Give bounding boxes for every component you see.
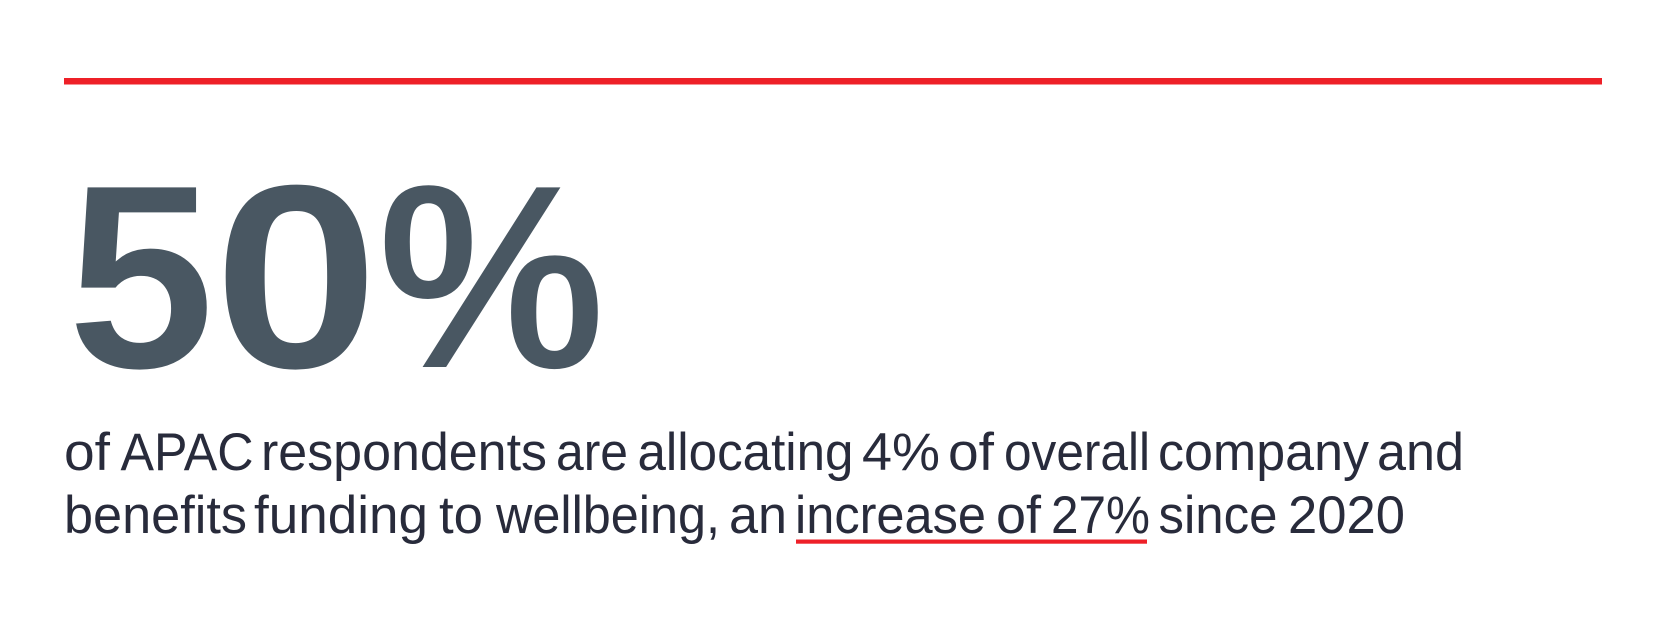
- description line 1: of: [64, 423, 110, 482]
- red underline under "increase of 27%": [796, 540, 1147, 544]
- description line 2: to: [439, 486, 483, 545]
- description line 2: increase: [795, 486, 986, 545]
- description line 1: company: [1158, 423, 1369, 482]
- headline statistic: 50%: [67, 129, 605, 424]
- description line 1: respondents: [261, 423, 547, 482]
- description line 1: and: [1377, 423, 1464, 482]
- description line 1: of: [948, 423, 994, 482]
- description line 1: APAC: [120, 423, 254, 482]
- top red rule: [64, 78, 1602, 84]
- headline statistic: 50%: 0: [213, 129, 380, 424]
- description line 1: allocating: [638, 423, 854, 482]
- description line 1: are: [556, 423, 628, 482]
- description line 2: of: [996, 486, 1041, 545]
- headline statistic: 50%: %: [378, 129, 606, 424]
- description line 1: overall: [1004, 423, 1150, 482]
- description line 2: an: [729, 486, 787, 545]
- description line 2: 27%: [1051, 486, 1150, 545]
- description line 1: 4%: [862, 423, 940, 482]
- description line 2: benefits: [64, 486, 247, 545]
- headline statistic: 50%: 5: [67, 129, 215, 424]
- description line 1: [64, 423, 1464, 482]
- description line 2: [64, 486, 1405, 545]
- description text block: [64, 423, 1464, 545]
- description line 2: funding: [254, 486, 428, 545]
- description line 2: since: [1158, 486, 1278, 545]
- description line 2: wellbeing,: [495, 486, 720, 545]
- description line 2: 2020: [1288, 486, 1405, 545]
